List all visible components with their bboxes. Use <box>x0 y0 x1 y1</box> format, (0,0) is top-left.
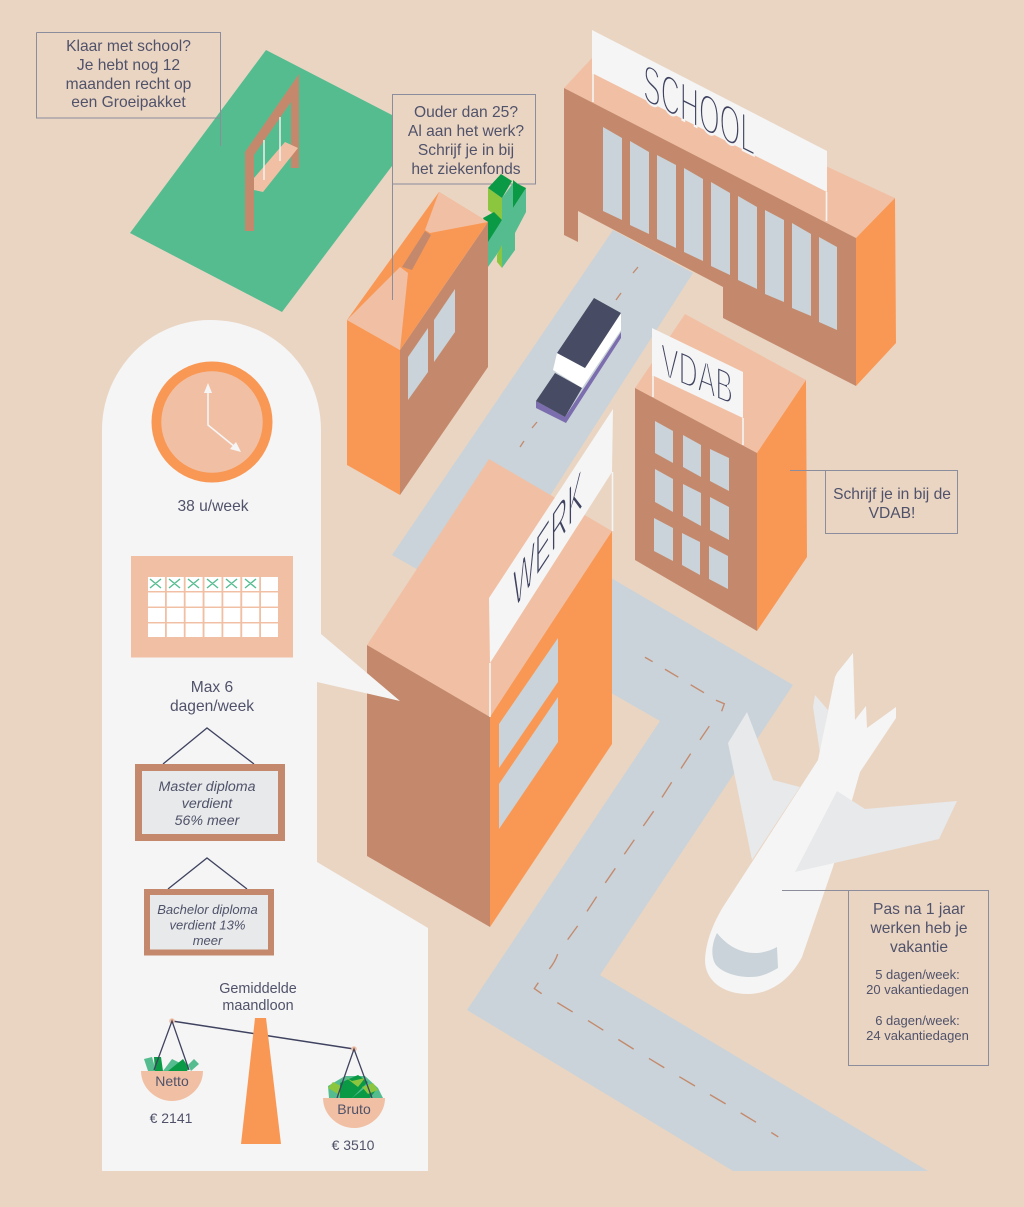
werk sign <box>489 409 613 717</box>
frame: master diploma <box>135 728 285 841</box>
school sign: SCHOOL <box>643 52 755 168</box>
building: house <box>347 184 488 495</box>
frame: bachelor diploma: verdient 13% <box>170 918 245 932</box>
text: hours per week: 38 u/week <box>177 498 249 515</box>
callout: ouder dan 25: het ziekenfonds <box>411 161 521 178</box>
frame: master diploma: Master diploma <box>158 779 256 795</box>
callout: ouder dan 25: Ouder dan 25? <box>414 104 518 121</box>
left money <box>144 1057 199 1071</box>
callout: ouder dan 25: Al aan het werk? <box>408 123 524 140</box>
building: school <box>564 30 896 386</box>
left bowl: Netto <box>155 1073 189 1089</box>
callout: vakantie: 24 vakantiedagen <box>866 1028 969 1043</box>
side panel with speech tail <box>102 320 428 1171</box>
callout: VDAB: Schrijf je in bij de <box>833 486 951 503</box>
VDAB sign <box>652 328 743 445</box>
text: days per week: Max 6 <box>191 679 233 696</box>
callout: vakantie: 5 dagen/week: <box>875 967 960 982</box>
callout: ouder dan 25: Schrijf je in bij <box>418 142 514 159</box>
icon: green cross <box>483 174 526 268</box>
icon: swing <box>245 74 299 231</box>
callout: vakantie: 20 vakantiedagen <box>866 982 969 997</box>
callout: ouder dan 25 <box>392 94 536 300</box>
callout: klaar met school: een Groeipakket <box>71 94 186 111</box>
frame: master diploma: 56% meer <box>175 813 241 829</box>
chart: balance scale <box>141 1018 385 1144</box>
callout: VDAB <box>790 470 958 534</box>
right bowl <box>323 1098 385 1128</box>
frame: bachelor diploma: meer <box>193 933 223 948</box>
VDAB sign: VDAB <box>661 335 733 416</box>
callout: vakantie: 6 dagen/week: <box>875 1013 960 1028</box>
school sign <box>592 30 827 221</box>
road: lower street with dashes <box>467 575 928 1171</box>
frame: bachelor diploma <box>144 858 274 956</box>
werk windows <box>499 638 558 829</box>
icon: airplane <box>705 653 957 994</box>
frame: bachelor diploma: Bachelor diploma <box>157 902 258 917</box>
icon: calendar <box>131 556 293 658</box>
right money <box>328 1075 383 1098</box>
building: werk <box>367 409 613 927</box>
building: VDAB <box>635 314 807 631</box>
text: net amount: € 2141 <box>150 1110 193 1126</box>
callout: VDAB: VDAB! <box>869 505 915 522</box>
text: gross amount: € 3510 <box>332 1137 375 1153</box>
text: days per week: dagen/week <box>170 698 254 715</box>
school windows <box>603 127 837 330</box>
car <box>536 298 621 423</box>
callout: vakantie: vakantie <box>890 939 948 956</box>
callout: klaar met school: Je hebt nog 12 <box>77 57 180 74</box>
callout: klaar met school: Klaar met school? <box>66 38 191 55</box>
callout: vakantie: Pas na 1 jaar <box>873 901 965 918</box>
callout: vakantie <box>782 890 988 1066</box>
callout: klaar met school <box>36 32 220 146</box>
frame: master diploma: verdient <box>182 796 233 812</box>
text: average monthly wage <box>219 981 297 1014</box>
right bowl: Bruto <box>337 1101 371 1117</box>
VDAB windows <box>654 421 729 589</box>
road: upper street <box>392 230 693 605</box>
icon: clock <box>152 362 272 482</box>
text: average monthly wage: maandloon <box>222 998 294 1014</box>
green lawn <box>130 50 392 312</box>
text: average monthly wage: Gemiddelde <box>219 981 297 997</box>
text: days per week <box>170 679 254 715</box>
left bowl <box>141 1071 203 1101</box>
callout: vakantie: werken heb je <box>869 920 968 937</box>
werk sign: WERK <box>513 456 583 624</box>
callout: klaar met school: maanden recht op <box>66 76 192 93</box>
